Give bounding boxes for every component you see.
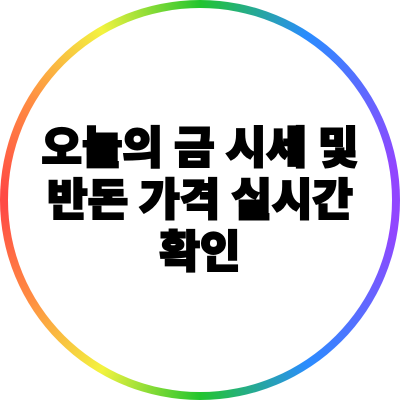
title line 3: 확인 [160,228,240,277]
title line 1: 오늘의 금 시세 및 [41,124,359,173]
title line 2: 반돈 가격 실시간 [47,176,353,225]
title [41,124,359,277]
